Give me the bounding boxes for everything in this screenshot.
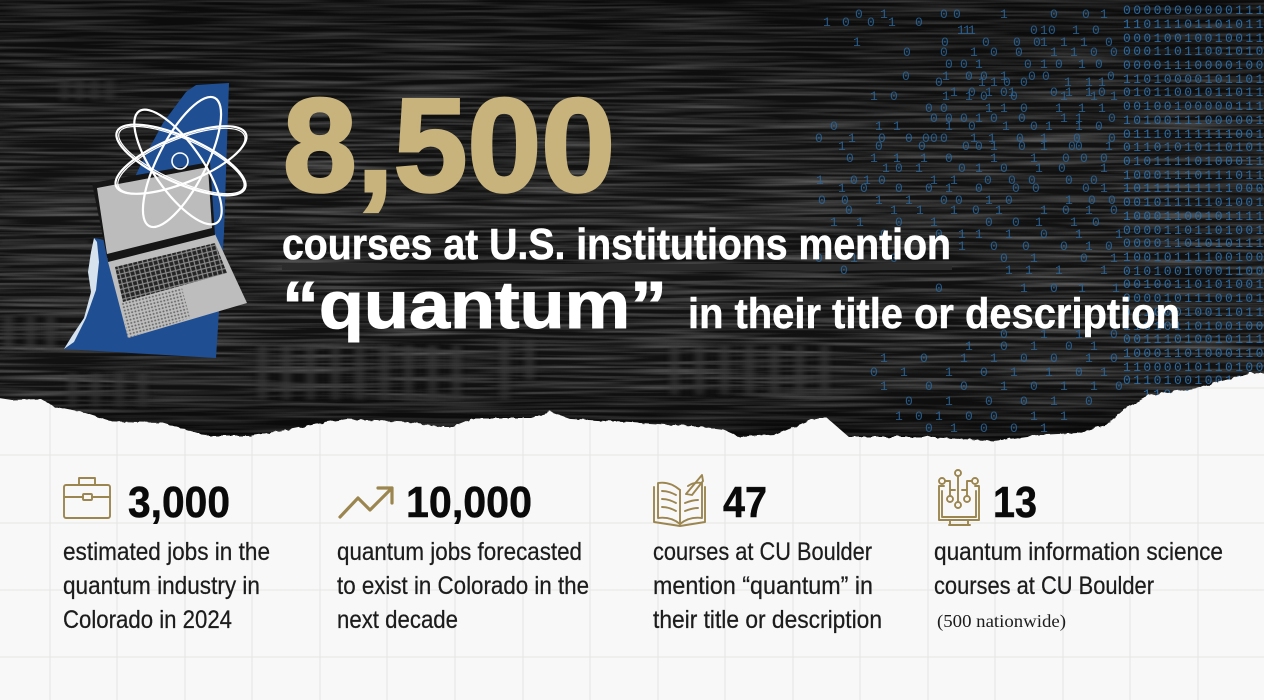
binary digit matrix: 01011001011011 bbox=[1123, 85, 1264, 100]
binary digit matrix: 00100100000111 bbox=[1123, 99, 1264, 114]
binary digit matrix: 01101001001011 bbox=[1123, 373, 1264, 388]
scattered binary digits: 010010 bbox=[905, 394, 1093, 409]
binary digit matrix: 01100010011011 bbox=[1123, 305, 1264, 320]
description bbox=[63, 538, 270, 634]
scattered binary digits: 00111011 bbox=[880, 227, 1123, 242]
icon: rising arrow bbox=[340, 488, 392, 517]
description bbox=[934, 538, 1223, 600]
scattered binary digits: 001001100 bbox=[903, 45, 1118, 60]
icon: briefcase bbox=[64, 478, 110, 518]
binary digit matrix: 11010000101101 bbox=[1123, 72, 1264, 87]
stat: 10,000 jobs bbox=[337, 478, 589, 634]
binary digit matrix: 10010111100100 bbox=[1123, 250, 1264, 265]
scattered binary digits: 10110010 bbox=[880, 351, 1118, 366]
scattered binary digits: 100001110 bbox=[853, 35, 1113, 50]
number: 10,000 bbox=[406, 478, 532, 527]
description: courses at CU Boulder bbox=[934, 572, 1154, 600]
binary digit matrix: 10001110111011 bbox=[1123, 168, 1264, 183]
icon: open book with pen bbox=[654, 475, 705, 526]
laptop bbox=[92, 162, 247, 338]
description: quantum information science bbox=[934, 538, 1223, 566]
stat: 13 courses bbox=[934, 470, 1223, 631]
binary digit matrix: 11000010110100 bbox=[1123, 360, 1264, 375]
binary digit matrix: 01011110100011 bbox=[1123, 154, 1264, 169]
description: their title or description bbox=[653, 606, 882, 634]
binary digit matrix: 10111111111000 bbox=[1123, 181, 1264, 196]
scattered binary digits bbox=[815, 7, 1123, 436]
binary digit matrix: 00010010010011 bbox=[1123, 31, 1264, 46]
binary digit matrix: 01110111111001 bbox=[1123, 127, 1264, 142]
binary digit matrix: 00111010010111 bbox=[1123, 332, 1264, 347]
stat: 47 courses bbox=[653, 475, 882, 634]
scattered binary digits: 101010110 bbox=[950, 85, 1106, 100]
scattered binary digits: 10010 bbox=[823, 15, 923, 30]
binary digit matrix: 00001011100101 bbox=[1123, 291, 1264, 306]
scattered binary digits: 101100111 bbox=[870, 89, 1118, 104]
scattered binary digits: 01100111 bbox=[935, 75, 1106, 90]
number: 47 bbox=[723, 478, 767, 527]
description: next decade bbox=[337, 606, 458, 634]
headline text bbox=[282, 220, 1180, 343]
scattered binary digits: 00101010 bbox=[945, 57, 1103, 72]
number: 13 bbox=[993, 478, 1037, 527]
torn paper edge bbox=[64, 238, 99, 349]
description: quantum jobs forecasted bbox=[337, 538, 582, 566]
blue torn paper bbox=[64, 83, 229, 358]
number: 3,000 bbox=[128, 478, 230, 527]
description: mention “quantum” in bbox=[653, 572, 873, 600]
scattered binary digits: 00110111 bbox=[925, 101, 1106, 116]
scattered binary digits: 01001000 bbox=[902, 69, 1115, 84]
scattered binary digits: 10000101001 bbox=[838, 139, 1113, 154]
headline number: 8,500 bbox=[283, 72, 615, 220]
scattered binary digits: 0100101 bbox=[815, 251, 1118, 266]
binary digit matrix: 00001110000100 bbox=[1123, 58, 1264, 73]
binary digit matrix: 00101111101001 bbox=[1123, 195, 1264, 210]
atom symbol bbox=[107, 87, 255, 237]
description: quantum industry in bbox=[63, 572, 260, 600]
scattered binary digits: 110100110 bbox=[830, 215, 1100, 230]
headline text: courses at U.S. institutions mention bbox=[282, 220, 951, 269]
description: courses at CU Boulder bbox=[653, 538, 872, 566]
binary digit matrix: 01101010110101 bbox=[1123, 140, 1264, 155]
binary digit matrix: 11011101101011 bbox=[1123, 17, 1264, 32]
binary digit matrix: 00100110101001 bbox=[1123, 277, 1264, 292]
scattered binary digits: 01001 bbox=[925, 421, 1048, 436]
binary digit matrix: 00000000000111 bbox=[1123, 3, 1264, 18]
scattered binary digits: 0110 bbox=[1000, 327, 1118, 342]
scattered binary digits: 000100110 bbox=[930, 111, 1116, 126]
binary digit matrix: 10001101000110 bbox=[1123, 346, 1264, 361]
dark header background bbox=[0, 0, 1264, 450]
binary digit matrix: 110100101 bbox=[1143, 387, 1235, 402]
description bbox=[653, 538, 882, 634]
nationwide note: (500 nationwide) bbox=[937, 611, 1066, 631]
binary digit matrix: 00011011001010 bbox=[1123, 44, 1264, 59]
scattered binary digits: 100010 bbox=[958, 239, 1113, 254]
scattered binary digits: 10101100000 bbox=[816, 173, 1098, 188]
stat: 3,000 jobs bbox=[63, 478, 270, 634]
description: Colorado in 2024 bbox=[63, 606, 232, 634]
scattered binary digits: 0100000110100 bbox=[815, 131, 1116, 146]
scattered binary digits: 0111011010 bbox=[845, 203, 1118, 218]
binary digit matrix bbox=[1123, 3, 1264, 402]
scattered binary digits: 1010011 bbox=[895, 409, 1068, 424]
scattered binary digits: 01101101 bbox=[870, 365, 1108, 380]
headline text: “quantum” bbox=[282, 268, 667, 343]
torn paper section bbox=[0, 373, 1264, 700]
illustration: laptop and atom on blue torn paper bbox=[64, 83, 255, 358]
binary digit matrix: 11010110100100 bbox=[1123, 319, 1264, 334]
binary digit matrix: 00001101101001 bbox=[1123, 223, 1264, 238]
scattered binary digits: 01111 bbox=[840, 263, 1108, 278]
description: estimated jobs in the bbox=[63, 538, 270, 566]
binary digit matrix: 00001101010111 bbox=[1123, 236, 1264, 251]
headline text: in their title or description bbox=[688, 290, 1180, 338]
scattered binary digits: 0111010110 bbox=[830, 119, 1103, 134]
scattered binary digits: 1000100001 bbox=[838, 181, 1108, 196]
description bbox=[337, 538, 589, 634]
binary digit matrix: 10100111000001 bbox=[1123, 113, 1264, 128]
binary digit matrix: 01010010001100 bbox=[1123, 264, 1264, 279]
icon: circuit monitor bbox=[939, 470, 979, 525]
binary digit matrix: 10001100101111 bbox=[1123, 209, 1264, 224]
scattered binary digits: 10101 bbox=[965, 339, 1098, 354]
scattered binary digits: 10010110 bbox=[880, 379, 1123, 394]
scattered binary digits: 01011 bbox=[935, 281, 1120, 296]
description: to exist in Colorado in the bbox=[337, 572, 589, 600]
scattered binary digits: 00110010100 bbox=[818, 193, 1116, 208]
scattered binary digits: 101010101 bbox=[882, 161, 1108, 176]
scattered binary digits: 11101010 bbox=[957, 23, 1100, 38]
scattered binary digits: 0111011000 bbox=[846, 151, 1108, 166]
scattered binary digits: 01001001 bbox=[855, 7, 1108, 22]
